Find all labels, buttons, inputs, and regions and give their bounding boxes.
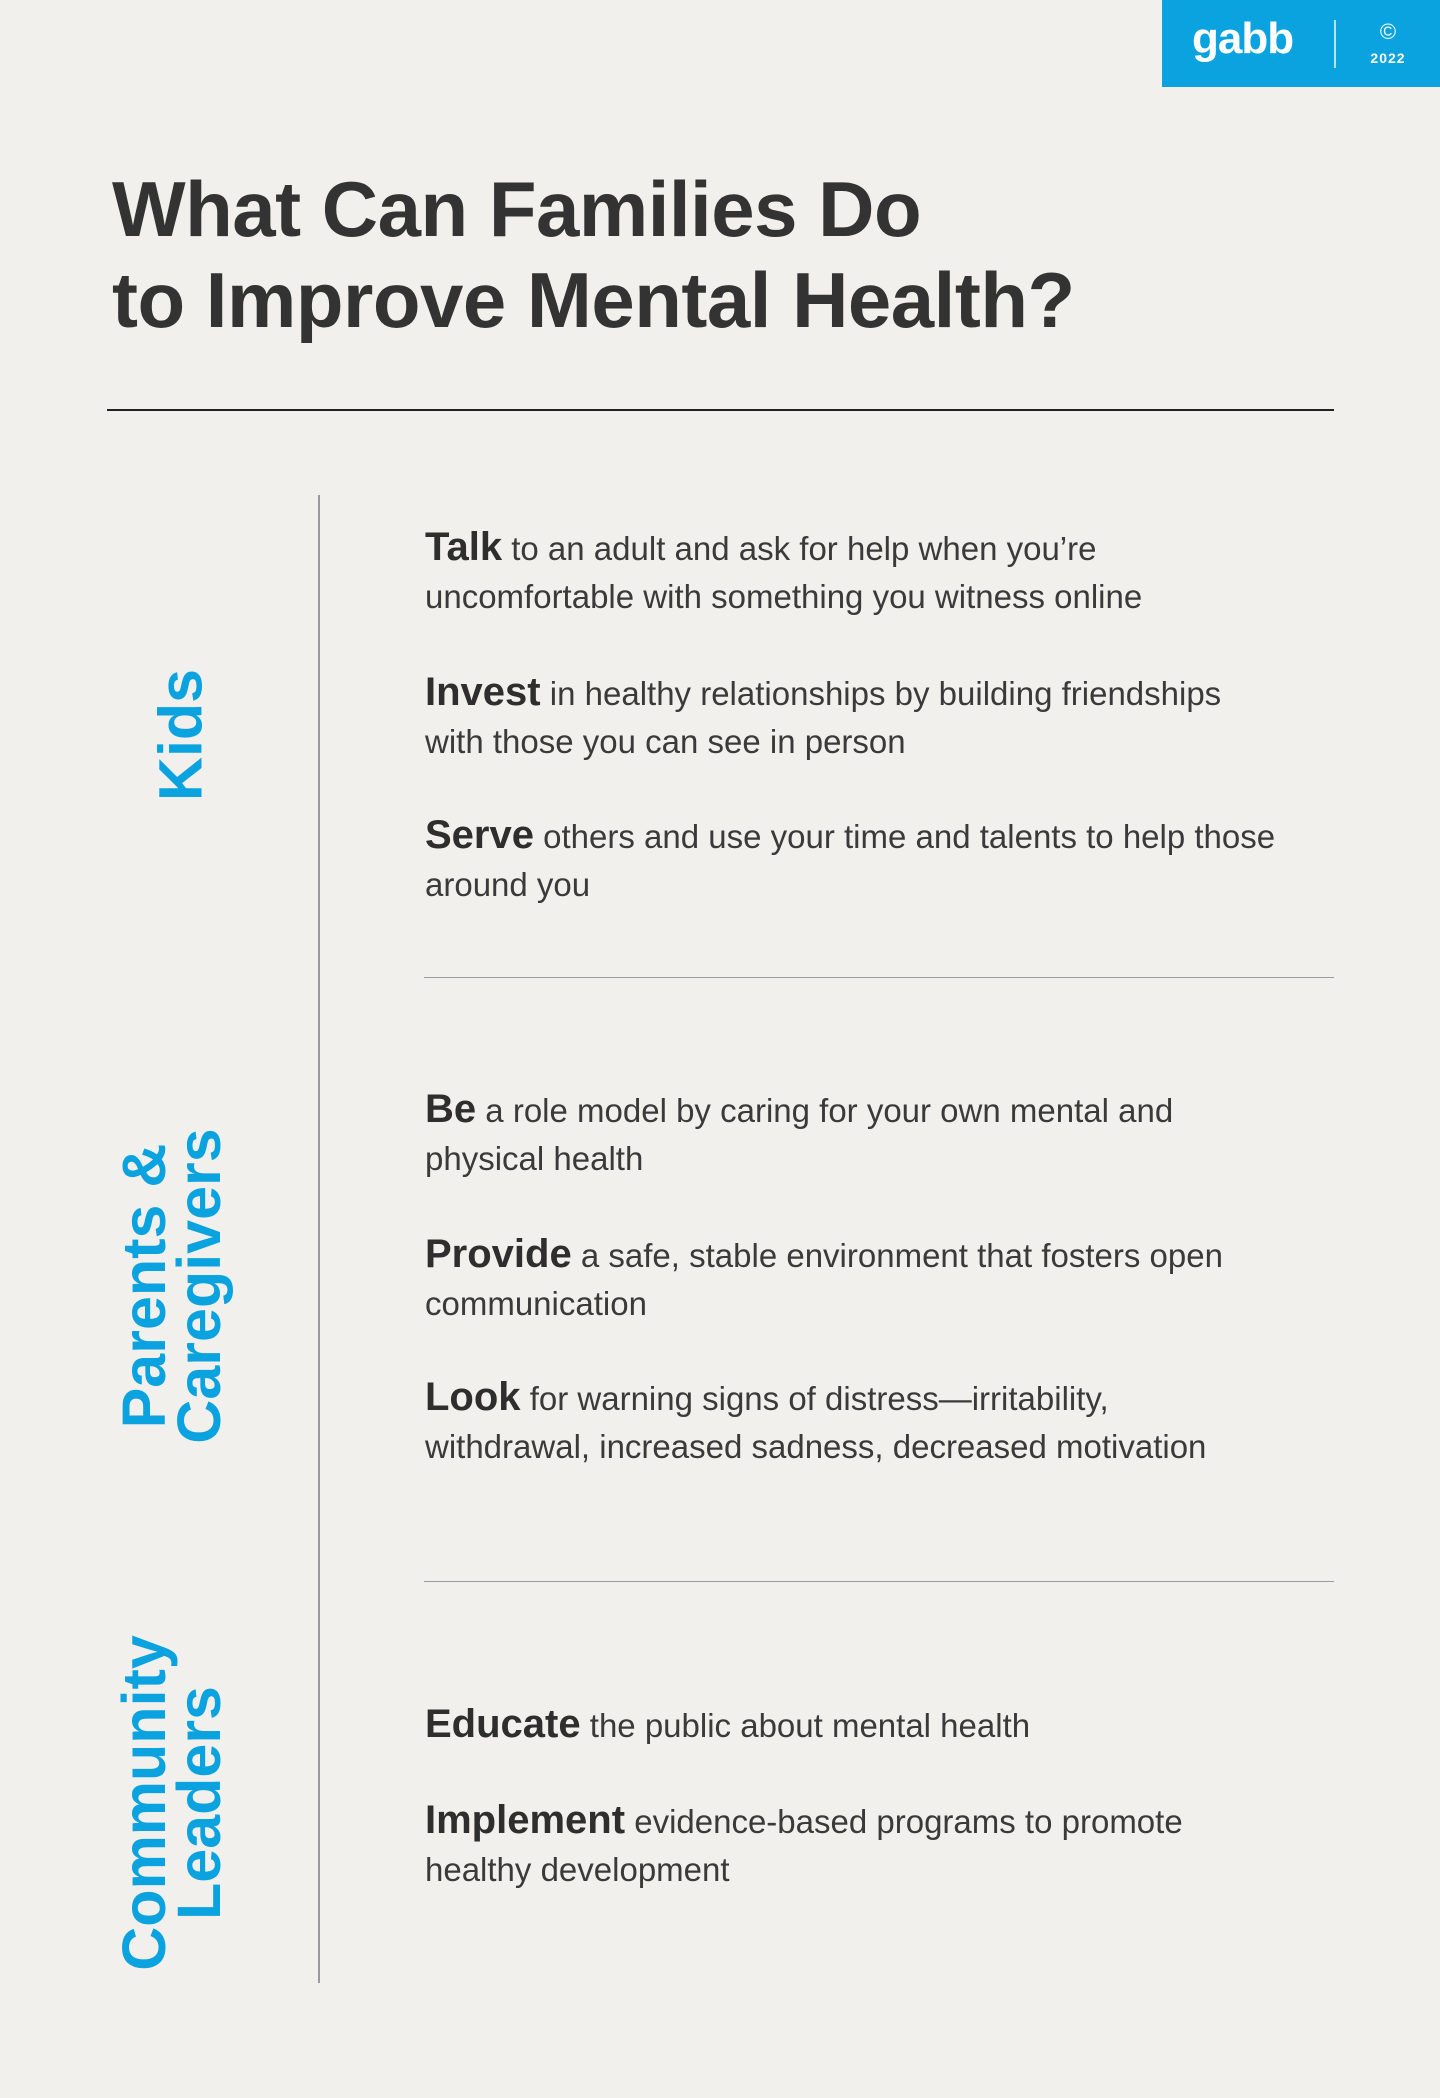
community item: implement: healthy development bbox=[425, 1851, 730, 1888]
label: Community Leaders: Leaders bbox=[165, 1686, 233, 1920]
parents item: provide: Provide a safe, stable environment that fosters open bbox=[425, 1232, 1223, 1276]
parents item: look: Look for warning signs of distress—irritability, bbox=[425, 1375, 1109, 1419]
kids item: serve: Serve others and use your time and talents to help those bbox=[425, 813, 1275, 857]
kids item: invest: Invest in healthy relationships by building friendships bbox=[425, 670, 1221, 714]
parents item: look bbox=[425, 1375, 1206, 1465]
label: Community Leaders: Community bbox=[110, 1635, 178, 1971]
title bbox=[112, 165, 1075, 344]
parents item: provide bbox=[425, 1232, 1223, 1322]
kids item: invest: with those you can see in person bbox=[425, 723, 906, 760]
parents item: be bbox=[425, 1087, 1173, 1177]
label: Parents & Caregivers bbox=[110, 1128, 233, 1444]
community item: implement bbox=[425, 1798, 1183, 1888]
kids item: serve: around you bbox=[425, 866, 590, 903]
logo badge bbox=[1162, 0, 1440, 87]
parents item: be: Be a role model by caring for your own mental and bbox=[425, 1087, 1173, 1131]
parents item: provide: communication bbox=[425, 1285, 647, 1322]
parents item: look: withdrawal, increased sadness, decreased motivation bbox=[425, 1428, 1206, 1465]
copyright: © bbox=[1380, 19, 1396, 44]
kids item: serve bbox=[425, 813, 1275, 903]
title: What Can Families Do bbox=[112, 165, 921, 253]
copyright: 2022 bbox=[1370, 50, 1406, 66]
title: to Improve Mental Health? bbox=[112, 256, 1075, 344]
kids item: talk bbox=[425, 525, 1142, 615]
label: Parents & Caregivers: Parents & bbox=[110, 1144, 178, 1428]
community item: educate: Educate the public about mental health bbox=[425, 1702, 1030, 1746]
kids item: talk: Talk to an adult and ask for help when you’re bbox=[425, 525, 1096, 569]
copyright bbox=[1370, 19, 1406, 66]
parents item: be: physical health bbox=[425, 1140, 643, 1177]
community item: implement: Implement evidence-based programs to promote bbox=[425, 1798, 1183, 1842]
label: Parents & Caregivers: Caregivers bbox=[165, 1128, 233, 1444]
label: Community Leaders bbox=[110, 1635, 233, 1971]
kids item: talk: uncomfortable with something you witness online bbox=[425, 578, 1142, 615]
label: Kids: Kids bbox=[146, 669, 214, 801]
kids item: invest bbox=[425, 670, 1221, 760]
logo text: gabb bbox=[1192, 14, 1293, 63]
